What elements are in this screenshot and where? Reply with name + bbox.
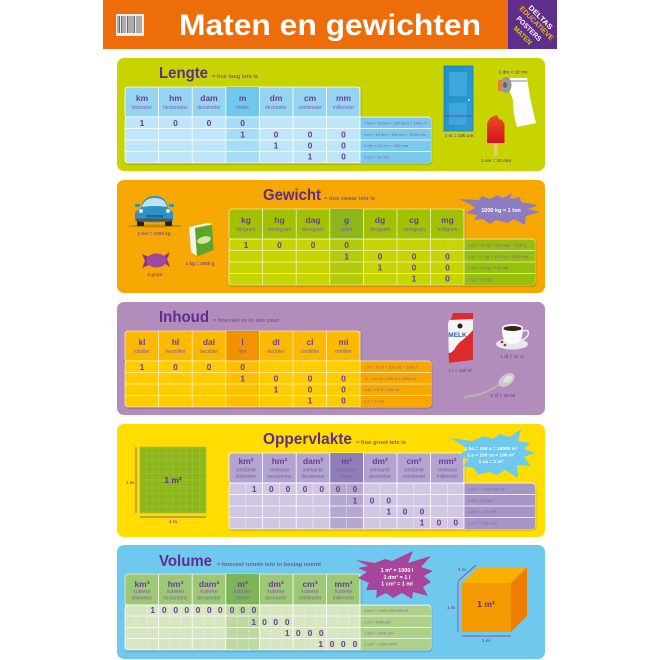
table: Oppervlakte: vierkante xyxy=(303,468,323,474)
table: Gewicht: mg xyxy=(441,215,454,225)
label: popsicle: 1 cm = 10 mm xyxy=(481,158,511,163)
table: Gewicht: 1 g = 10 dg = 100 cg = 1000 mg xyxy=(468,254,528,259)
table: Volume: 0 xyxy=(273,617,278,627)
table: Lengte: 0 xyxy=(341,129,346,139)
table: Inhoud: 0 xyxy=(274,373,279,383)
table: Lengte: hm xyxy=(169,93,182,103)
table: Inhoud: 0 xyxy=(341,384,346,394)
table: Volume: 1 dm³ = 1000 cm³ xyxy=(364,630,395,636)
panel: Lengte xyxy=(117,58,545,171)
table: Gewicht: g xyxy=(344,215,349,225)
badge: series: DELTAS xyxy=(527,4,554,32)
label: car: 1 ton = 1000 kg xyxy=(137,231,171,236)
table: Inhoud: 0 xyxy=(341,396,346,406)
table: Volume: 0 xyxy=(173,605,178,615)
panel: Oppervlakte xyxy=(117,424,545,537)
table: Oppervlakte: 0 xyxy=(286,484,291,494)
table: Oppervlakte: decameter xyxy=(301,474,325,480)
icon: candy xyxy=(142,252,170,268)
table: Lengte: cm xyxy=(304,93,317,103)
table: Volume: kubieke xyxy=(200,589,218,595)
table: Volume: 0 xyxy=(308,628,313,638)
table: Lengte: 1 xyxy=(140,118,145,128)
diagram: square metre: 1 m² xyxy=(164,475,182,485)
icon: door xyxy=(444,66,473,131)
table: Gewicht: 1 xyxy=(244,240,249,250)
table: Lengte: km xyxy=(136,93,149,103)
table: Inhoud: 1 xyxy=(240,373,245,383)
subtitle: Oppervlakte: = hoe groot iets is xyxy=(356,440,406,446)
table: Lengte: 1 cm = 10 mm xyxy=(364,154,390,160)
table: Oppervlakte: 1 xyxy=(252,484,257,494)
table: Gewicht: 1 xyxy=(378,262,383,272)
table: Volume: 1 m³ = 1000 dm³ xyxy=(364,620,392,624)
diagram: square metre: 1 m xyxy=(169,519,177,524)
table: Gewicht: dag xyxy=(305,215,321,225)
heading: Volume: Volume xyxy=(159,553,212,570)
icon: toilet roll xyxy=(498,77,536,127)
panel: Inhoud xyxy=(117,302,545,415)
icon: milk carton xyxy=(448,313,473,363)
table: Lengte: 0 xyxy=(308,129,313,139)
table: Volume: kubieke xyxy=(301,589,319,595)
table: Oppervlakte: 1 xyxy=(386,506,391,516)
table: Gewicht: kilogram xyxy=(237,227,255,233)
table: Oppervlakte: cm² xyxy=(406,456,422,466)
table: Oppervlakte: decimeter xyxy=(369,474,391,480)
table: Volume: kubieke xyxy=(234,589,251,595)
table: Oppervlakte: vierkante xyxy=(269,468,290,474)
icon: barcode xyxy=(116,14,144,36)
table: Volume: 0 xyxy=(353,639,358,649)
table: Inhoud: 0 xyxy=(173,362,178,372)
callout: 1000 kg = 1 ton xyxy=(458,193,540,225)
table: Inhoud: 0 xyxy=(341,373,346,383)
table: Oppervlakte: 1 m² = 100 dm² xyxy=(468,498,494,503)
table: Volume: 1 xyxy=(318,639,323,649)
table: Lengte: meter xyxy=(236,105,249,111)
table: Oppervlakte: 0 xyxy=(403,506,408,516)
subtitle: Gewicht: = hoe zwaar iets is xyxy=(324,196,375,202)
table: Volume: 0 xyxy=(230,605,235,615)
table: Oppervlakte: meter xyxy=(340,474,353,480)
table: Oppervlakte: hectometer xyxy=(267,474,292,480)
table: Oppervlakte: 0 xyxy=(303,484,308,494)
table: Volume: kubieke xyxy=(167,589,184,595)
icon: spoon xyxy=(464,370,517,398)
table: Lengte: mm xyxy=(336,93,351,103)
table: Oppervlakte: km² xyxy=(238,456,254,466)
table: Gewicht: 0 xyxy=(412,262,417,272)
table: Gewicht: 0 xyxy=(378,251,383,261)
table: Gewicht: gram xyxy=(341,227,352,233)
label: toilet roll: 1 dm = 10 cm xyxy=(499,70,527,74)
table: Oppervlakte: hm² xyxy=(272,456,287,466)
table: Oppervlakte: 0 xyxy=(319,484,324,494)
table: Lengte: 0 xyxy=(341,140,346,150)
table: Oppervlakte: vierkante xyxy=(437,468,458,474)
table: Lengte: hectometer xyxy=(163,105,188,111)
table: Inhoud: ml xyxy=(339,337,348,347)
table: Inhoud: milliliter xyxy=(335,349,352,355)
table: Lengte: decameter xyxy=(197,105,221,111)
table: Inhoud xyxy=(125,331,431,407)
subtitle: Volume: = hoeveel ruimte iets in beslag neemt xyxy=(217,562,321,568)
subtitle: Inhoud: = hoeveel er in iets past xyxy=(213,318,279,324)
table: Volume: decimeter xyxy=(265,596,287,602)
diagram: cubic metre: 1 m³ xyxy=(477,599,495,609)
table: Oppervlakte: 1 xyxy=(420,518,425,528)
callout: 1000 kg = 1 ton: 1000 kg = 1 ton xyxy=(481,208,521,214)
label: door: 1 m = 100 cm xyxy=(445,133,473,138)
table: Gewicht: 0 xyxy=(311,240,316,250)
table: Gewicht: hg xyxy=(274,215,285,225)
table: Lengte: centimeter xyxy=(298,105,322,111)
label: spoon: 1 cl = 10 ml xyxy=(491,393,515,398)
table: Oppervlakte: vierkante xyxy=(370,468,390,474)
table: Volume: meter xyxy=(236,596,249,602)
table: Volume: hectometer xyxy=(163,596,188,602)
table: Volume: kubieke xyxy=(267,589,285,595)
table: Inhoud: 1 l = 10 dl = 100 cl = 1000 ml xyxy=(364,376,416,381)
icon: popsicle xyxy=(487,115,504,156)
table: Lengte: 0 xyxy=(240,118,245,128)
table: Gewicht: 1 xyxy=(412,274,417,284)
table: Gewicht: decigram xyxy=(370,227,390,233)
table: Oppervlakte: 0 xyxy=(370,495,375,505)
table: Inhoud: dal xyxy=(203,337,215,347)
table: Lengte: decimeter xyxy=(265,105,287,111)
table: Volume: 0 xyxy=(196,605,201,615)
table: Gewicht: 0 xyxy=(445,251,450,261)
table: Volume: kubieke xyxy=(335,589,352,595)
table: Gewicht: 0 xyxy=(277,240,282,250)
table: Oppervlakte: vierkante xyxy=(336,468,357,474)
table: Volume: 0 xyxy=(262,617,267,627)
table: Inhoud: centiliter xyxy=(301,349,320,355)
badge: series: MATEN xyxy=(512,25,533,47)
table: Lengte: 0 xyxy=(173,118,178,128)
table: Gewicht: 1 cg = 10 mg xyxy=(468,276,491,282)
table: Gewicht xyxy=(229,209,535,285)
table: Volume xyxy=(125,574,431,650)
table: Lengte: 1 m = 10 dm = 100 cm = 1000 mm xyxy=(364,132,427,137)
label: candy: 2 gram xyxy=(147,272,163,277)
subtitle: Lengte: = hoe lang iets is xyxy=(212,74,258,80)
table: Volume: 1 cm³ = 1000 mm³ xyxy=(364,642,398,646)
table: Lengte: 0 xyxy=(308,140,313,150)
diagram: cubic metre xyxy=(447,565,527,643)
table: Oppervlakte: millimeter xyxy=(437,474,459,480)
table: Volume: 0 xyxy=(252,605,257,615)
callout: volume conversions xyxy=(356,551,433,599)
diagram: square metre: 1 m xyxy=(126,480,134,485)
callout: volume conversions: 1 cm³ = 1 ml xyxy=(381,580,413,588)
table: Inhoud: kiloliter xyxy=(134,349,150,355)
table: Volume: 0 xyxy=(330,639,335,649)
table: Volume: 1 km³ = 1 000 000 000 m³ xyxy=(364,608,409,613)
table: Inhoud: cl xyxy=(306,337,314,347)
panel: Gewicht xyxy=(117,180,545,293)
table: Oppervlakte: 0 xyxy=(353,484,358,494)
table: Gewicht: dg xyxy=(375,215,385,225)
table: Lengte: 0 xyxy=(341,152,346,162)
diagram: square metre xyxy=(126,447,206,524)
icon: package xyxy=(189,223,214,256)
table: Volume: centimeter xyxy=(298,596,322,602)
table: Volume: 1 xyxy=(150,605,155,615)
table: Oppervlakte: 0 xyxy=(269,484,274,494)
table: Inhoud: liter xyxy=(239,349,247,355)
table: Inhoud: decaliter xyxy=(200,349,219,355)
callout: hectare conversions xyxy=(450,429,535,478)
table: Inhoud: hectoliter xyxy=(165,349,186,355)
table: Volume: hm³ xyxy=(168,579,183,589)
table: Gewicht: 1 kg = 10 hg = 100 dag = 1000 g xyxy=(468,242,526,248)
callout: volume conversions: 1 m³ = 1000 l xyxy=(381,567,414,574)
table: Oppervlakte: m² xyxy=(341,456,352,466)
table: Oppervlakte: vierkante xyxy=(404,468,424,474)
table: Oppervlakte: 1 km² = 1 000 000 m² xyxy=(468,486,506,492)
table: Oppervlakte: vierkante xyxy=(236,468,256,474)
table: Gewicht: 0 xyxy=(412,251,417,261)
table: Gewicht: decagram xyxy=(302,227,324,233)
table: Volume: 0 xyxy=(285,617,290,627)
table: Oppervlakte: 0 xyxy=(420,506,425,516)
callout: volume conversions: 1 dm³ = 1 l xyxy=(383,574,411,581)
table: Lengte: 1 xyxy=(274,140,279,150)
heading: Gewicht: Gewicht xyxy=(263,187,322,204)
table: Inhoud: 1 kl = 10 hl = 100 dal = 1000 l xyxy=(364,364,417,370)
table: Inhoud: 0 xyxy=(308,373,313,383)
callout: hectare conversions: 1 a = 100 ca = 100 m² xyxy=(467,452,515,458)
diagram: cubic metre: 1 m xyxy=(447,605,455,610)
table: Gewicht: 0 xyxy=(445,274,450,284)
table: Gewicht: 0 xyxy=(445,262,450,272)
table: Inhoud: 0 xyxy=(308,384,313,394)
table: Gewicht: 0 xyxy=(344,240,349,250)
table: Inhoud: 1 cl = 10 ml xyxy=(364,398,384,404)
table: Lengte: 1 xyxy=(240,129,245,139)
table: Volume: dam³ xyxy=(199,579,219,589)
badge: series xyxy=(508,0,557,49)
table: Inhoud: 1 xyxy=(140,362,145,372)
table: Volume: m³ xyxy=(237,579,248,589)
table: Lengte: m xyxy=(239,93,247,103)
table: Gewicht: 1 dg = 10 cg = 100 mg xyxy=(468,265,508,270)
table: Oppervlakte: 1 cm² = 100 mm² xyxy=(468,520,498,526)
table: Lengte: 1 km = 10 hm = 100 dam = 1000 m xyxy=(364,120,428,126)
label: coffee cup: 1 dl = 10 cl xyxy=(500,354,524,359)
table: Lengte: dam xyxy=(200,93,218,103)
table: Oppervlakte: dm² xyxy=(372,456,388,466)
table: Gewicht: hectogram xyxy=(268,227,291,233)
table: Oppervlakte: 0 xyxy=(336,484,341,494)
table: Gewicht: centigram xyxy=(403,227,425,233)
table: Volume: 0 xyxy=(319,628,324,638)
table: Oppervlakte: kilometer xyxy=(236,474,256,480)
heading: Inhoud: Inhoud xyxy=(159,309,209,326)
table: Gewicht: 1 xyxy=(344,251,349,261)
table: Inhoud: 1 dl = 10 cl = 100 ml xyxy=(364,387,399,392)
table: Oppervlakte: 1 dm² = 100 cm² xyxy=(468,509,497,514)
table: Oppervlakte: 1 xyxy=(353,495,358,505)
table: Oppervlakte: dam² xyxy=(303,456,323,466)
table: Oppervlakte xyxy=(229,453,535,529)
icon: coffee cup xyxy=(496,324,528,350)
table: Volume: 0 xyxy=(296,628,301,638)
table: Inhoud: hl xyxy=(172,337,179,347)
table: Volume: dm³ xyxy=(268,579,284,589)
badge: series: EDUCATIEVE xyxy=(518,5,555,42)
table: Gewicht: milligram xyxy=(438,227,458,233)
heading: Oppervlakte: Oppervlakte xyxy=(263,431,352,448)
heading: Lengte: Lengte xyxy=(159,65,208,82)
badge: series: POSTERS xyxy=(515,15,542,43)
table: Lengte: 1 xyxy=(308,152,313,162)
table: Oppervlakte: 0 xyxy=(437,518,442,528)
table: Oppervlakte: mm² xyxy=(439,456,457,466)
table: Volume: km³ xyxy=(134,579,150,589)
table: Inhoud: 0 xyxy=(207,362,212,372)
table: Oppervlakte: centimeter xyxy=(402,474,426,480)
table: Gewicht: kg xyxy=(241,215,251,225)
header banner xyxy=(103,0,557,49)
label: milk carton: 1 l = 100 cl xyxy=(448,368,472,373)
table: Volume: kilometer xyxy=(132,596,152,602)
icon: milk carton: MELK xyxy=(448,332,467,339)
table: Volume: 0 xyxy=(162,605,167,615)
table: Inhoud: dl xyxy=(272,337,280,347)
table: Inhoud: l xyxy=(241,337,244,347)
table: Volume: decameter xyxy=(197,596,221,602)
table: Volume: millimeter xyxy=(333,596,355,602)
table: Volume: kubieke xyxy=(133,589,151,595)
table: Inhoud: 1 xyxy=(308,396,313,406)
table: Inhoud: 0 xyxy=(240,362,245,372)
table: Inhoud: deciliter xyxy=(267,349,285,355)
table: Volume: cm³ xyxy=(302,579,318,589)
table: Volume: 0 xyxy=(207,605,212,615)
panel: Volume xyxy=(117,545,545,659)
table: Volume: 1 xyxy=(251,617,256,627)
table: Lengte: millimeter xyxy=(333,105,355,111)
title: Maten en gewichten xyxy=(179,9,481,42)
label: package: 1 kg = 1000 g xyxy=(186,261,215,266)
table: Volume: 0 xyxy=(341,639,346,649)
table: Lengte xyxy=(125,87,431,163)
callout: hectare conversions: 1 ca = 1 m² xyxy=(479,459,504,465)
table: Oppervlakte: 0 xyxy=(386,495,391,505)
table: Inhoud: 1 xyxy=(274,384,279,394)
table: Volume: 0 xyxy=(240,605,245,615)
table: Volume: mm³ xyxy=(335,579,353,589)
table: Inhoud: kl xyxy=(138,337,146,347)
table: Lengte: dm xyxy=(270,93,283,103)
table: Volume: 1 xyxy=(285,628,290,638)
diagram: cubic metre: 1 m xyxy=(458,567,466,572)
table: Lengte: kilometer xyxy=(132,105,152,111)
table: Gewicht: cg xyxy=(409,215,419,225)
callout: hectare conversions: 1 ha = 100 a = 10000 m² xyxy=(464,446,518,452)
table: Lengte: 0 xyxy=(274,129,279,139)
icon: car xyxy=(128,196,182,228)
table: Volume: 0 xyxy=(184,605,189,615)
table: Volume: 0 xyxy=(218,605,223,615)
table: Lengte: 1 dm = 10 cm = 100 mm xyxy=(364,143,409,148)
table: Lengte: 0 xyxy=(207,118,212,128)
table: Oppervlakte: 0 xyxy=(453,518,458,528)
diagram: cubic metre: 1 m xyxy=(482,638,490,643)
